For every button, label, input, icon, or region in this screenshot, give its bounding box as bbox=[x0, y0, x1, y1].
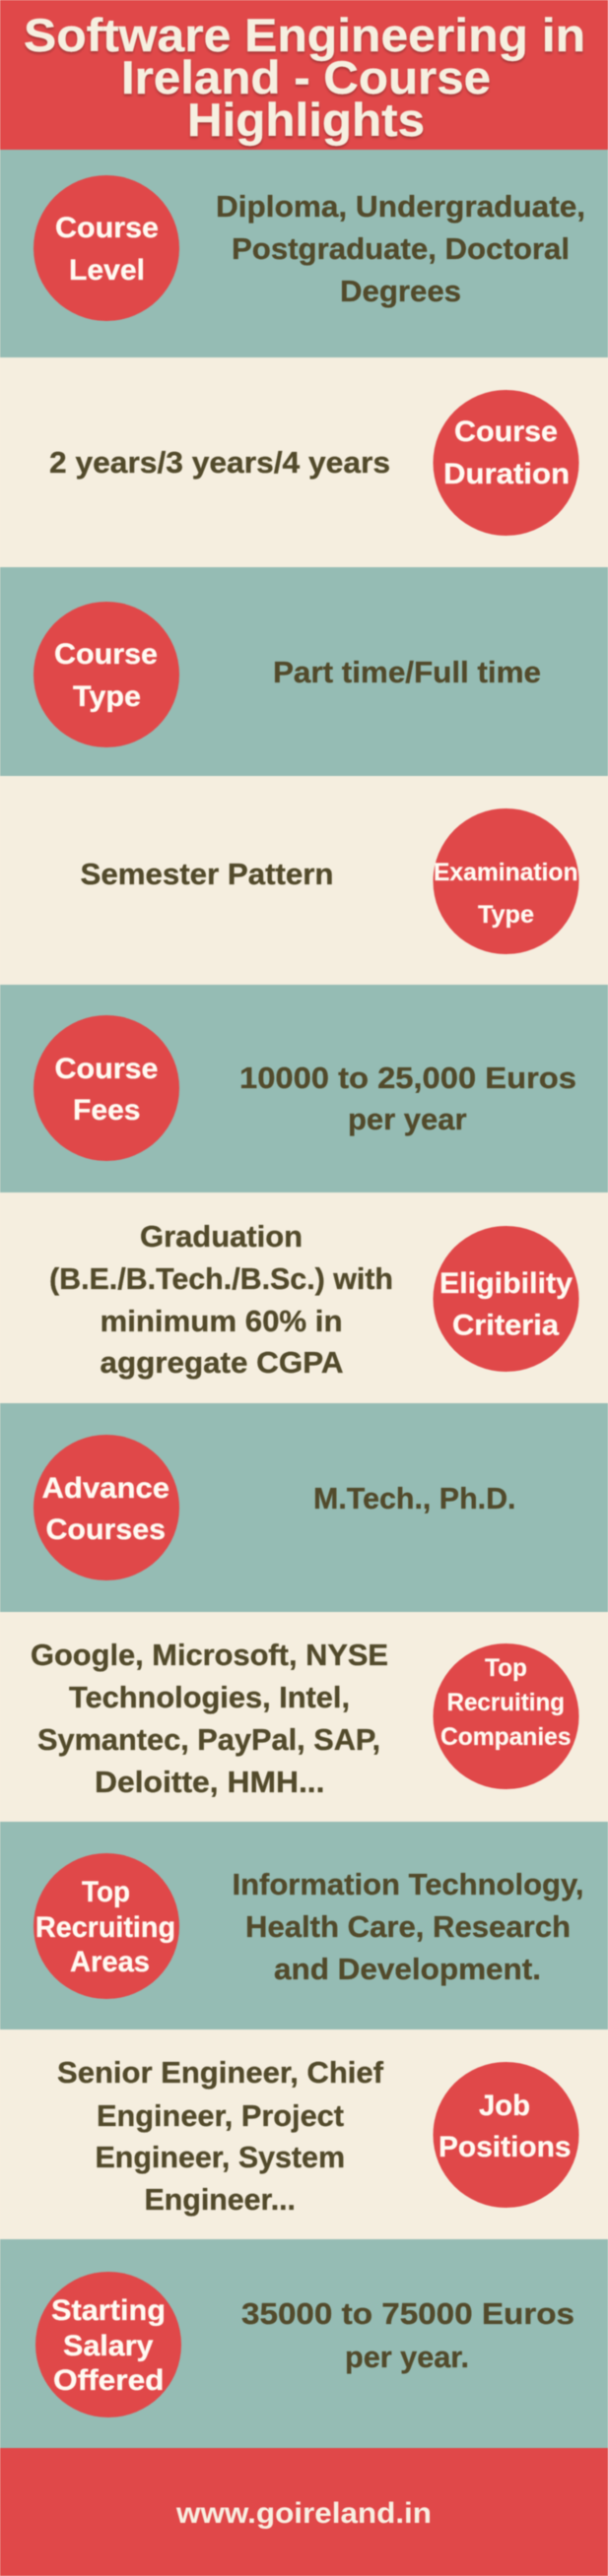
panel: course fees bbox=[0, 985, 608, 1192]
badge: advance courses bbox=[34, 1435, 179, 1580]
badge: top recruiting areas bbox=[34, 1853, 179, 1999]
text: examination type value: Semester Pattern bbox=[81, 857, 333, 891]
panel: top recruiting companies bbox=[0, 1612, 608, 1822]
badge: course level: Level bbox=[69, 254, 145, 287]
text: starting salary value: 35000 to 75000 Euros bbox=[241, 2296, 574, 2331]
text: course type value: Part time/Full time bbox=[273, 655, 541, 689]
badge: course level bbox=[34, 175, 179, 321]
text: course level value bbox=[216, 189, 585, 308]
header: title banner bbox=[0, 0, 608, 150]
badge: top recruiting areas: Recruiting bbox=[35, 1911, 175, 1944]
badge: course type bbox=[34, 602, 179, 747]
panel: course level bbox=[0, 150, 608, 357]
badge: course type: Type bbox=[73, 680, 141, 713]
badge: course type: Course bbox=[54, 638, 158, 671]
text: website url: www.goireland.in bbox=[175, 2497, 432, 2530]
badge: advance courses: Courses bbox=[45, 1513, 166, 1546]
text: course fees value: 10000 to 25,000 Euros bbox=[239, 1061, 576, 1095]
text: top recruiting companies value: Technologies, Intel, bbox=[69, 1680, 350, 1714]
badge: examination type: Examination bbox=[434, 859, 577, 886]
badge: course level: Course bbox=[55, 212, 159, 244]
badge: top recruiting companies bbox=[434, 1643, 579, 1789]
panel: eligibility criteria bbox=[0, 1192, 608, 1403]
badge: top recruiting companies: Recruiting bbox=[447, 1689, 565, 1716]
text: job positions value: Senior Engineer, Chief bbox=[57, 2055, 384, 2090]
badge: job positions bbox=[434, 2062, 579, 2208]
badge: starting salary: Salary bbox=[63, 2330, 154, 2362]
badge: course duration: Course bbox=[454, 416, 558, 448]
text: eligibility criteria value: (B.E./B.Tech./B.Sc.) with bbox=[49, 1261, 393, 1296]
panel: course duration bbox=[0, 357, 608, 567]
text: eligibility criteria value: Graduation bbox=[140, 1219, 303, 1254]
badge: starting salary bbox=[35, 2272, 181, 2417]
text: eligibility criteria value bbox=[49, 1219, 393, 1380]
text: top recruiting areas value: and Development. bbox=[274, 1952, 541, 1986]
text: top recruiting companies value: Symantec, PayPal, SAP, bbox=[37, 1722, 380, 1757]
text: starting salary value: per year. bbox=[345, 2340, 469, 2374]
panel: top recruiting areas bbox=[0, 1822, 608, 2029]
panel: starting salary bbox=[0, 2239, 608, 2448]
badge: course fees: Course bbox=[55, 1053, 158, 1085]
badge: starting salary: Offered bbox=[53, 2364, 164, 2397]
text: starting salary value bbox=[241, 2296, 574, 2374]
panel: job positions bbox=[0, 2029, 608, 2239]
text: course level value: Diploma, Undergraduate, bbox=[216, 189, 585, 224]
badge: course fees bbox=[34, 1015, 179, 1161]
badge: examination type bbox=[434, 808, 579, 954]
text: job positions value: Engineer, Project bbox=[97, 2098, 344, 2133]
text: advance courses value: M.Tech., Ph.D. bbox=[313, 1481, 516, 1515]
badge: course duration bbox=[434, 390, 579, 536]
text: eligibility criteria value: aggregate CGPA bbox=[101, 1345, 343, 1380]
text: course level value: Postgraduate, Doctoral bbox=[232, 231, 570, 266]
panel: course type bbox=[0, 567, 608, 776]
badge: top recruiting areas: Areas bbox=[70, 1946, 150, 1978]
text: top recruiting areas value: Health Care, Research bbox=[245, 1909, 571, 1944]
text: eligibility criteria value: minimum 60% in bbox=[101, 1304, 343, 1338]
text: job positions value: Engineer, System bbox=[95, 2140, 345, 2174]
text: job positions value bbox=[57, 2055, 384, 2217]
badge: top recruiting companies: Top bbox=[485, 1654, 527, 1682]
panel: advance courses bbox=[0, 1403, 608, 1612]
text: course level value: Degrees bbox=[340, 274, 461, 308]
badge: examination type: Type bbox=[478, 901, 534, 929]
text: top recruiting areas value bbox=[233, 1867, 583, 1986]
text: course fees value: per year bbox=[348, 1102, 467, 1136]
badge: course fees: Fees bbox=[73, 1094, 140, 1127]
badge: top recruiting companies: Companies bbox=[440, 1723, 572, 1751]
title: Software Engineering in bbox=[24, 9, 585, 61]
text: course fees value bbox=[239, 1061, 576, 1136]
badge: course duration: Duration bbox=[443, 458, 570, 490]
badge: eligibility criteria bbox=[434, 1226, 579, 1372]
badge: job positions: Job bbox=[479, 2090, 530, 2122]
badge: job positions: Positions bbox=[439, 2131, 572, 2163]
badge: advance courses: Advance bbox=[41, 1472, 169, 1505]
text: top recruiting companies value bbox=[31, 1638, 388, 1799]
badge: eligibility criteria: Eligibility bbox=[439, 1267, 573, 1300]
footer: website banner bbox=[0, 2448, 608, 2576]
text: top recruiting areas value: Information Technology, bbox=[233, 1867, 583, 1901]
panel: examination type bbox=[0, 776, 608, 985]
badge: eligibility criteria: Criteria bbox=[452, 1310, 559, 1341]
badge: starting salary: Starting bbox=[51, 2294, 166, 2327]
badge: top recruiting areas: Top bbox=[82, 1876, 130, 1908]
title: Highlights bbox=[187, 94, 425, 146]
text: course duration value: 2 years/3 years/4 years bbox=[49, 445, 390, 480]
title bbox=[24, 9, 585, 146]
text: top recruiting companies value: Google, Microsoft, NYSE bbox=[31, 1638, 388, 1672]
text: top recruiting companies value: Deloitte, HMH... bbox=[95, 1765, 325, 1799]
title: Ireland - Course bbox=[121, 51, 491, 103]
text: job positions value: Engineer... bbox=[144, 2182, 296, 2217]
